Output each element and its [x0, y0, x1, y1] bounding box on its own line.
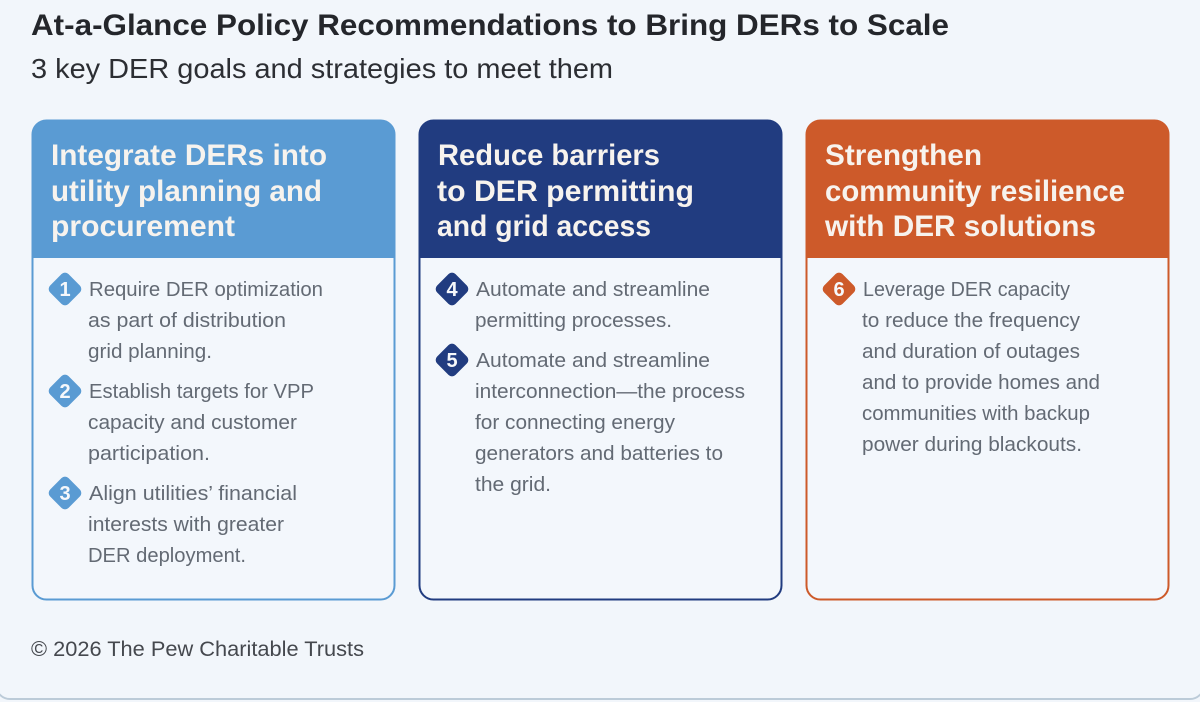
icon: number 4: 4: [446, 279, 458, 301]
panel: integrate DERs: [32, 120, 395, 600]
recommendation 6: and to provide homes and: [862, 371, 1100, 394]
panel heading: integrate DERs: Integrate DERs into: [51, 139, 327, 172]
icon: number 4: [434, 271, 470, 307]
recommendation 2: [88, 380, 314, 465]
recommendation 6: communities with backup: [862, 402, 1090, 425]
panel heading: integrate DERs: procurement: [51, 210, 235, 243]
recommendation 3: [88, 482, 297, 567]
panel heading: reduce barriers: to DER permitting: [437, 175, 694, 208]
recommendation 6: [862, 278, 1100, 456]
recommendation 5: generators and batteries to: [475, 442, 723, 465]
copyright footer: © 2026 The Pew Charitable Trusts: [31, 637, 364, 661]
recommendation 4: permitting processes.: [475, 309, 672, 332]
recommendation 1: grid planning.: [88, 340, 212, 363]
icon: number 2: 2: [59, 381, 71, 403]
recommendation 2: capacity and customer: [88, 411, 297, 434]
title: At-a-Glance Policy Recommendations to Bring DERs to Scale: [31, 9, 949, 42]
panel heading: integrate DERs: [32, 120, 395, 258]
recommendation 6: to reduce the frequency: [862, 309, 1081, 332]
recommendation 5: Automate and streamline: [476, 349, 710, 372]
panel heading: reduce barriers: and grid access: [437, 210, 651, 243]
icon: number 6: [821, 271, 857, 307]
icon: number 1: 1: [59, 279, 71, 301]
recommendation 5: interconnection—the process: [475, 380, 745, 403]
recommendation 4: [475, 278, 710, 332]
icon: number 2: [47, 373, 83, 409]
recommendation 5: the grid.: [475, 473, 551, 496]
recommendation 2: Establish targets for VPP: [89, 380, 314, 403]
panel heading: community resilience: Strengthen: [825, 139, 982, 172]
icon: number 6: 6: [833, 279, 845, 301]
panel: community resilience: [806, 120, 1169, 600]
icon: number 3: 3: [59, 483, 71, 505]
recommendation 3: Align utilities’ financial: [89, 482, 297, 505]
recommendation 3: interests with greater: [88, 513, 284, 536]
recommendation 1: as part of distribution: [88, 309, 286, 332]
recommendation 6: Leverage DER capacity: [863, 278, 1071, 301]
subtitle: 3 key DER goals and strategies to meet them: [31, 53, 613, 84]
recommendation 5: for connecting energy: [475, 411, 676, 434]
recommendation 5: [475, 349, 745, 496]
icon: number 5: 5: [446, 350, 458, 372]
icon: number 5: [434, 342, 470, 378]
recommendation 6: and duration of outages: [862, 340, 1080, 363]
panel heading: community resilience: [806, 120, 1169, 258]
icon: number 3: [47, 475, 83, 511]
recommendation 6: power during blackouts.: [862, 433, 1082, 456]
icon: number 1: [47, 271, 83, 307]
panel heading: reduce barriers: Reduce barriers: [438, 139, 660, 172]
recommendation 1: [88, 278, 323, 363]
recommendation 1: Require DER optimization: [89, 278, 323, 301]
recommendation 2: participation.: [88, 442, 210, 465]
panel heading: community resilience: with DER solutions: [824, 210, 1096, 243]
recommendation 3: DER deployment.: [88, 544, 246, 567]
panel heading: integrate DERs: utility planning and: [51, 175, 322, 208]
recommendation 4: Automate and streamline: [476, 278, 710, 301]
panel heading: community resilience: community resilience: [825, 175, 1125, 208]
panel: reduce barriers: [419, 120, 782, 600]
panel heading: reduce barriers: [419, 120, 782, 258]
